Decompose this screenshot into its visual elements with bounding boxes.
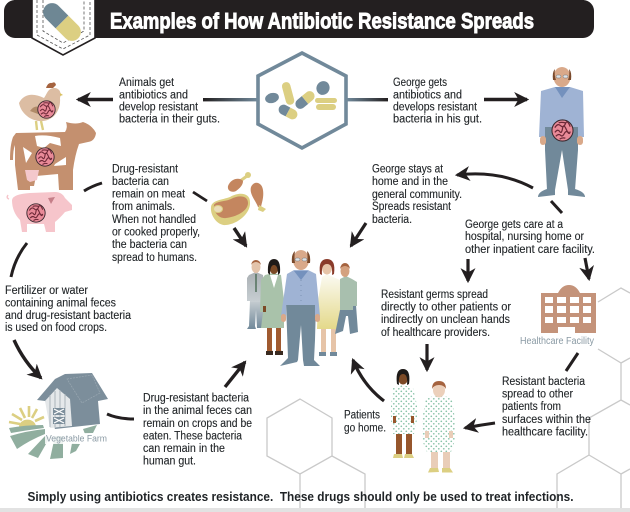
text: resistant germs — [381, 289, 511, 339]
text: George stays home: general community. — [372, 189, 462, 201]
text: animals get antibiotics: Animals get — [119, 77, 175, 89]
text: surfaces: Resistant bacteria — [502, 376, 586, 388]
text: meat: Drug-resistant — [112, 164, 179, 176]
arrow: care to germs text — [466, 259, 470, 281]
arrow: surfaces to patients — [465, 423, 495, 428]
icon: capsule badge — [32, 0, 95, 55]
text: meat: spread to humans. — [112, 252, 197, 264]
text: surfaces: patients from — [502, 401, 561, 413]
text: animals get antibiotics — [119, 77, 220, 126]
barn — [37, 373, 108, 429]
figure: male patient — [422, 381, 455, 472]
text: crops: in the animal feces can — [143, 405, 252, 417]
text: George stays home: Spreads resistant — [372, 201, 452, 213]
connector: hexagon to George text — [347, 98, 388, 101]
text: George gets antibiotics: bacteria in his gut. — [393, 114, 482, 126]
text: resistant germs: of healthcare providers. — [381, 327, 490, 339]
arrow: to George — [484, 98, 527, 101]
figure: female patient — [391, 369, 417, 458]
text: George gets care: George gets care at a — [465, 219, 564, 231]
text: fertilizer: and drug-resistant bacteria — [5, 310, 132, 322]
text: animals get antibiotics: antibiotics and — [119, 90, 188, 102]
page bottom edge — [0, 508, 630, 512]
text: meat: bacteria can — [112, 176, 169, 188]
arrow: patients home to people — [353, 360, 384, 401]
arrow: crops to people — [225, 362, 245, 387]
text: crops — [143, 393, 252, 468]
arrow: care to healthcare facility — [585, 258, 589, 279]
text: fertilizer: Fertilizer or water — [5, 285, 88, 297]
connector: farm to text — [107, 414, 134, 419]
arrow: community to people — [351, 223, 366, 246]
arrow: to animals — [78, 98, 113, 101]
person: woman in cream dress — [317, 259, 341, 356]
gut — [36, 148, 54, 166]
connector: pig to fertilizer — [11, 243, 27, 277]
connector: hexagon to animals text — [203, 98, 257, 101]
text: surfaces — [502, 376, 591, 438]
person: woman in green — [260, 259, 284, 355]
text: fertilizer: containing animal feces — [5, 298, 116, 310]
farm label — [45, 433, 108, 444]
gut — [552, 120, 573, 141]
text: surfaces: surfaces within the — [502, 414, 591, 426]
text: George gets antibiotics: develops resistant — [393, 102, 478, 114]
text: George stays home: bacteria. — [372, 214, 412, 226]
text: surfaces: spread to other — [502, 388, 573, 400]
gut — [38, 101, 55, 118]
title banner — [4, 0, 594, 38]
footer message: Simply using antibiotics creates resistance. These drugs should only be used to treat infections. — [28, 490, 574, 504]
icon: meat and drumsticks — [211, 172, 266, 225]
text: patients go home: Patients — [344, 410, 380, 422]
icon: cow — [10, 122, 96, 190]
text: fertilizer: is used on food crops. — [5, 322, 107, 334]
text: George gets antibiotics: antibiotics and — [393, 90, 462, 102]
gut — [27, 204, 45, 222]
facility label: Healthcare Facility — [520, 336, 594, 347]
title: Examples of How Antibiotic Resistance Spreads — [110, 8, 534, 34]
figure group: people — [247, 250, 358, 366]
text: resistant germs: directly to other patients or — [381, 302, 511, 314]
text: animals get antibiotics: develop resistant — [119, 102, 199, 114]
figure: George — [538, 67, 585, 197]
connector: George to care text — [551, 201, 562, 213]
text: crops: Drug-resistant bacteria — [143, 393, 250, 405]
field — [9, 425, 97, 459]
text: George stays home: home and in the — [372, 176, 448, 188]
connector: pig to meat text — [84, 183, 102, 191]
text: meat: or cooked properly, — [112, 226, 200, 238]
text: meat: When not handled — [112, 214, 196, 226]
background hexagon pattern — [267, 288, 630, 508]
text: animals get antibiotics: bacteria in their guts. — [119, 114, 220, 126]
text: crops: remain on crops and be — [143, 418, 252, 430]
arrow: George to community — [457, 174, 533, 188]
text: crops: eaten. These bacteria — [143, 430, 243, 442]
text: George gets care: other inpatient care facility. — [465, 244, 595, 256]
person: George in centre — [280, 250, 320, 366]
icon: antibiotics hexagon — [258, 53, 346, 148]
text: meat — [112, 164, 200, 264]
text: resistant germs: Resistant germs spread — [381, 289, 488, 301]
text: George stays home: George stays at — [372, 164, 444, 176]
text: George gets care — [465, 219, 595, 256]
text: crops: can remain in the — [143, 443, 225, 455]
icon: chicken — [19, 82, 63, 130]
text: George gets care: hospital, nursing home or — [465, 231, 584, 243]
connector: facility to surfaces text — [566, 353, 578, 371]
arrow: germs to patients — [425, 344, 429, 370]
icon: vegetable farm — [9, 373, 108, 459]
arrow: fertilizer to farm — [14, 340, 41, 378]
person: man in green shirt — [335, 263, 358, 334]
text: surfaces: healthcare facility. — [502, 426, 588, 438]
text: crops: human gut. — [143, 456, 196, 468]
text: meat: the bacteria can — [112, 239, 187, 251]
sun — [9, 406, 44, 424]
text: fertilizer — [5, 285, 132, 334]
text: resistant germs: indirectly on unclean hands — [381, 314, 510, 326]
text: patients go home: go home. — [344, 422, 386, 434]
text: meat: from animals. — [112, 201, 175, 213]
icon: pig — [7, 192, 72, 232]
arrow: meat to people — [234, 228, 246, 246]
icon: healthcare facility — [520, 285, 596, 347]
text: meat: remain on meat — [112, 188, 186, 200]
text: George stays home — [372, 164, 462, 226]
text: patients go home — [344, 410, 386, 434]
icon: vegetable farm: Vegetable Farm — [46, 434, 107, 444]
connector: meat text to meat — [193, 192, 207, 201]
text: George gets antibiotics — [393, 77, 482, 126]
person: man in grey suit — [247, 260, 264, 329]
text: George gets antibiotics: George gets — [393, 77, 447, 89]
